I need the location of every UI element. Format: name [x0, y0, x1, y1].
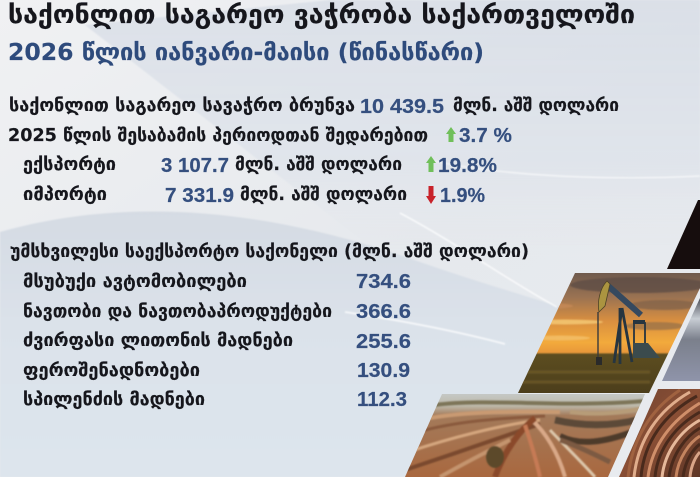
- summary: export: [23, 154, 497, 177]
- subtitle: 2026 წლის იანვარი-მაისი (წინასწარი): [8, 40, 484, 66]
- heading: largest export goods: უმსხვილესი საექსპორტო საქონელი (მლნ. აშშ დოლარი): [10, 241, 529, 262]
- export row: precious metal ores: ძვირფასი ლითონის მადნები: [23, 330, 293, 351]
- export row: precious metal ores: [23, 330, 411, 353]
- export row: precious metal ores: 255.6: [356, 331, 411, 353]
- summary: comparison with 2025: 2025 წლის შესაბამის პერიოდთან შედარებით: [8, 125, 428, 146]
- summary: total turnover: [9, 95, 619, 118]
- export row: oil and oil products: 366.6: [356, 301, 411, 323]
- summary: import: იმპორტი: [23, 184, 107, 205]
- summary: export: 3 107.7: [161, 155, 229, 177]
- summary: import: 1.9%: [440, 185, 485, 207]
- export row: light vehicles: მსუბუქი ავტომობილები: [23, 271, 247, 292]
- photo: open-pit mine: [400, 394, 650, 477]
- main title: საქონლით საგარეო ვაჭრობა საქართველოში: [8, 0, 635, 29]
- summary: total turnover: მლნ. აშშ დოლარი: [453, 95, 619, 116]
- export row: ferroalloys: [23, 360, 410, 382]
- photo: dark top-right panel: [667, 200, 700, 269]
- export row: ferroalloys: 130.9: [357, 360, 410, 382]
- export row: light vehicles: 734.6: [356, 271, 411, 293]
- export row: copper ores: სპილენძის მადნები: [23, 389, 205, 410]
- export row: light vehicles: [23, 271, 411, 293]
- summary: export: 19.8%: [438, 155, 497, 177]
- export row: copper ores: [23, 389, 407, 411]
- export row: oil and oil products: ნავთობი და ნავთობაპროდუქტები: [23, 301, 332, 322]
- summary: export: მლნ. აშშ დოლარი: [235, 154, 402, 175]
- photo: copper wire coil: [615, 389, 700, 477]
- photo: oil pump at sunset: [510, 273, 700, 393]
- summary: comparison with 2025: 3.7 %: [459, 125, 512, 147]
- summary: total turnover: 10 439.5: [360, 96, 444, 118]
- summary: total turnover: საქონლით საგარეო სავაჭრო ბრუნვა: [9, 95, 355, 116]
- summary: import: [23, 184, 485, 207]
- summary: import: 7 331.9: [165, 185, 234, 207]
- summary: export: ექსპორტი: [23, 154, 116, 175]
- photo: airplane panel: [662, 298, 700, 381]
- export row: copper ores: 112.3: [357, 389, 407, 411]
- export row: ferroalloys: ფეროშენადნობები: [23, 360, 200, 381]
- summary: import: მლნ. აშშ დოლარი: [240, 184, 407, 205]
